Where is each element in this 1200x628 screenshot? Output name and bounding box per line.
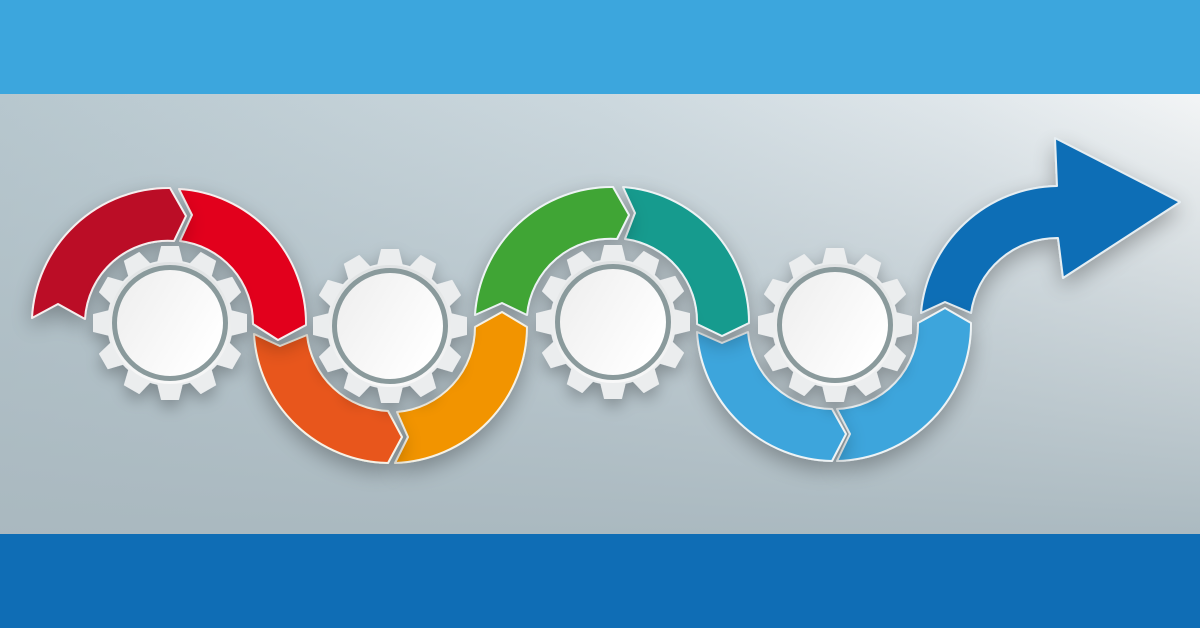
- arrow: blue final segment: [921, 138, 1180, 313]
- gear 3: [536, 246, 690, 398]
- segment: yellow orange: [395, 312, 527, 463]
- process wave: [32, 138, 1180, 463]
- segment: green: [475, 187, 629, 315]
- segment: light blue right: [837, 308, 971, 461]
- segment: dark red: [32, 188, 186, 319]
- segment: orange: [254, 334, 402, 463]
- top blue band: [0, 0, 1200, 94]
- gear 2: [314, 250, 466, 402]
- gear 4: [758, 248, 912, 402]
- grey gradient panel: [0, 94, 1200, 534]
- segment: teal: [623, 187, 749, 336]
- gear 1: [94, 246, 246, 400]
- segment: light blue left: [697, 332, 846, 461]
- segment: red: [179, 189, 306, 340]
- bottom dark blue band: [0, 534, 1200, 628]
